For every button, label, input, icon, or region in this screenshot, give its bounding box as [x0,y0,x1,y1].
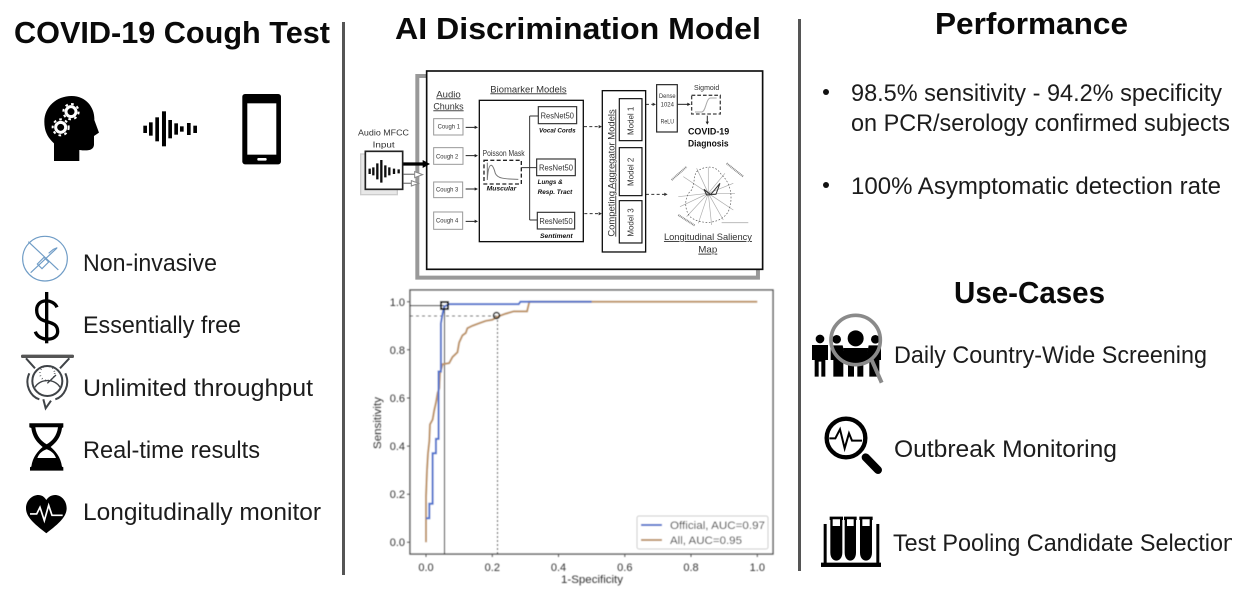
item: Essentially free: Essentially free [83,312,241,339]
item: Longitudinally monitor: Longitudinally monitor [83,499,321,526]
box: biomarker models: Muscular [487,185,517,192]
x ticks and labels [407,302,765,574]
box: competing aggregator models: Competing Aggregator Models [606,109,616,237]
chart: ROC curve: Sensitivity [372,396,384,449]
item: Unlimited throughput: Unlimited throughput [83,375,313,402]
icon: phone [242,94,281,164]
input: Audio MFCC: Input [373,140,395,150]
column: audio chunks: Chunks [433,101,464,111]
y tick labels: 0.8 [390,345,405,357]
box: dense layer: ReLU [661,118,674,125]
x ticks and labels: 0.6 [617,562,632,574]
heading: Performance: Performance [935,6,1128,41]
box: competing aggregator models: Model 2 [626,157,635,186]
marker: square [441,302,448,309]
box: biomarker models [479,84,583,242]
box: biomarker models: Lungs & [538,179,563,186]
label: COVID-19 Diagnosis: COVID-19 [688,126,729,136]
panel: Performance and use-cases [812,6,1236,567]
reference lines [410,306,444,554]
column: audio chunks [433,89,478,229]
icon: crossed-out syringe [23,236,67,281]
item: Non-invasive: Non-invasive [83,250,217,277]
diagram: model architecture: Diagnosis [688,139,729,149]
text block: sensitivity [823,80,1230,137]
item: Test Pooling Candidate Selection: Test Pooling Candidate Selection [893,530,1236,557]
box: biomarker models: ResNet50 [541,111,574,120]
y tick labels: 1.0 [390,297,405,309]
box: dense layer: 1024 [661,101,674,108]
text block: asymptomatic: 100% Asymptomatic detection rate [851,173,1221,200]
y tick labels: 0.6 [390,393,405,405]
y tick labels: 0.0 [390,537,405,549]
item: Unlimited throughput [21,355,313,408]
axis titles: 1-Specificity [561,574,624,586]
box: biomarker models: Poisson Mask [483,149,525,158]
chart: ROC curve [372,290,773,586]
box: competing aggregator models [602,91,646,252]
input: Audio MFCC: Audio MFCC [358,128,409,138]
box: biomarker models: Resp. Tract [538,189,573,196]
item: Real-time results: Real-time results [83,437,260,464]
panel: COVID-19 Cough Test [14,15,330,533]
box: biomarker models: Biomarker Models [490,84,567,94]
label: Longitudinal Saliency Map: Longitudinal Saliency [664,232,752,242]
icon: magnifier with pulse [827,419,878,470]
curve: Official [426,302,592,518]
icon row: head, sound wave, phone [44,94,281,164]
list: benefits [21,236,321,533]
icon: head with gears [44,96,99,161]
title: COVID-19 Cough Test: COVID-19 Cough Test [14,15,330,50]
item: Outbreak Monitoring [827,419,1117,470]
box: dense layer [657,85,691,132]
box: biomarker models: ResNet50 [539,164,574,173]
y tick labels: 0.4 [390,441,405,453]
diagram: model architecture: Map [698,245,717,255]
chart: longitudinal saliency radar [672,163,748,226]
x ticks and labels: 0.0 [418,562,434,574]
box: biomarker models: Vocal Cords [539,128,576,135]
item: Real-time results [29,423,260,471]
item: Essentially free [35,292,241,343]
column: audio chunks: Cough 1 [438,124,460,131]
item: Test Pooling Candidate Selection [821,517,1236,567]
shadow frame [417,76,758,278]
item: Daily Country-Wide Screening [812,315,1207,383]
box: sigmoid [692,85,720,125]
box: competing aggregator models: Model 1 [626,106,635,135]
item: Non-invasive [23,236,217,281]
title: AI Discrimination Model: AI Discrimination Model [395,11,761,46]
box: dense layer: Dense [659,93,676,100]
item: Longitudinally monitor [26,495,321,533]
heading: Use-Cases: Use-Cases [954,275,1105,310]
main frame [427,71,763,269]
text block: sensitivity: on PCR/serology confirmed subjects [851,110,1230,137]
x ticks and labels: 1.0 [750,562,765,574]
y tick labels: 0.2 [390,489,405,501]
legend: All, AUC=0.95 [670,535,742,547]
icon: people under magnifier [812,315,882,383]
column: audio chunks: Cough 4 [436,217,459,224]
x ticks and labels: 0.2 [485,562,500,574]
x ticks and labels: 0.4 [551,562,566,574]
box: biomarker models: ResNet50 [539,217,573,226]
axes frame [410,290,773,554]
marker: circle [494,312,500,318]
y tick labels [390,297,405,549]
diagram: model architecture [358,71,763,278]
legend: Official, AUC=0.97 [670,520,765,532]
divider: right [798,19,801,571]
item: Daily Country-Wide Screening: Daily Country-Wide Screening [894,342,1207,369]
legend [637,516,768,549]
column: audio chunks: Cough 2 [436,153,459,160]
icon: dollar sign [35,292,58,343]
curve: All [426,302,757,542]
icon: speed gauge [21,355,74,408]
input: Audio MFCC [358,128,430,195]
icon: test tubes [821,517,881,567]
dashed connectors [584,103,668,215]
box: competing aggregator models: Model 3 [626,208,635,237]
icon: hourglass [29,423,63,471]
box: sigmoid: Sigmoid [694,85,719,92]
icon: heart with pulse [26,495,67,533]
panel: AI Discrimination Model [358,11,773,586]
column: audio chunks: Audio [436,89,461,99]
divider: left [342,22,345,575]
text block: sensitivity: 98.5% sensitivity - 94.2% specificity [851,80,1222,107]
x ticks and labels: 0.8 [683,562,699,574]
column: audio chunks: Cough 3 [436,186,459,193]
box: biomarker models: Sentiment [540,233,573,240]
icon: sound wave [143,111,197,146]
item: Outbreak Monitoring: Outbreak Monitoring [894,436,1117,463]
